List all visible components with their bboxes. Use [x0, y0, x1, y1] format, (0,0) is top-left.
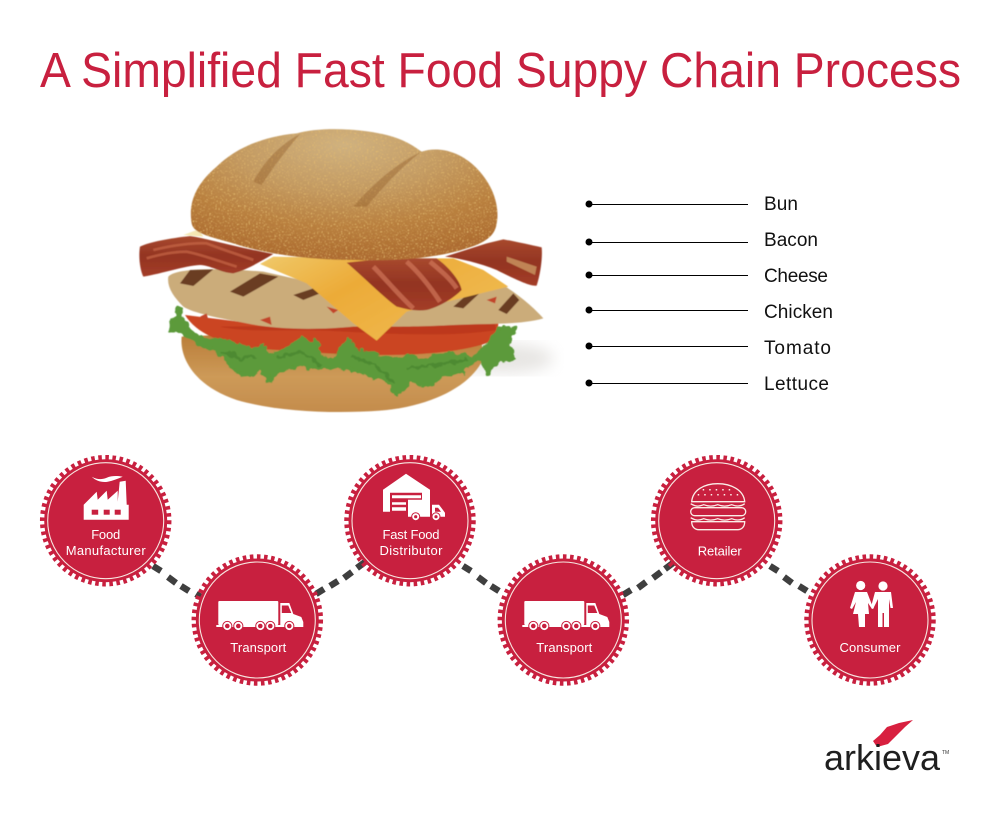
- label: Tomato: [586, 338, 831, 359]
- label text: Food: [91, 527, 120, 542]
- ingredient labels: [586, 194, 833, 395]
- cheese: [183, 229, 508, 341]
- title: A Simplified Fast Food Suppy Chain Process: [40, 44, 961, 98]
- logo: arkieva: [824, 720, 949, 778]
- logo wordmark: arkieva: [824, 737, 941, 778]
- icon: factory: [84, 476, 129, 520]
- label text: Fast Food: [382, 527, 440, 542]
- icon: warehouse and van: [383, 474, 445, 521]
- bottom bun: [181, 333, 483, 412]
- icon: truck: [216, 601, 303, 631]
- step: Transport: [500, 557, 626, 683]
- label text: Transport: [536, 640, 593, 655]
- step: Fast Food Distributor: [347, 458, 473, 584]
- label text: Retailer: [698, 544, 742, 559]
- label: Bacon: Bacon: [764, 230, 818, 251]
- icon: burger outline: [691, 484, 746, 530]
- icon: couple: [850, 581, 893, 627]
- bacon strips: [139, 236, 273, 277]
- label: Chicken: [586, 302, 833, 323]
- tomato: [185, 315, 498, 355]
- label: Lettuce: [586, 374, 829, 395]
- dashed connectors: [153, 562, 807, 597]
- lettuce: [168, 308, 515, 395]
- burger illustration: [139, 129, 553, 412]
- burger shadow: [453, 343, 553, 373]
- label: Lettuce: Lettuce: [764, 374, 829, 395]
- step: Retailer: [654, 458, 780, 584]
- label text: Manufacturer: [66, 543, 146, 558]
- icon: truck: [522, 601, 609, 631]
- trademark: TM: [942, 750, 949, 756]
- label: Bun: [586, 194, 798, 215]
- logo swoosh: [873, 720, 913, 747]
- step: Transport: [194, 557, 320, 683]
- label text: Transport: [230, 640, 287, 655]
- label: Bacon: [586, 230, 818, 251]
- chicken: [168, 269, 543, 329]
- label: Cheese: [586, 266, 828, 287]
- label text: Distributor: [380, 543, 443, 558]
- label: Chicken: Chicken: [764, 302, 833, 323]
- step: Consumer: [807, 557, 933, 683]
- label text: Consumer: [840, 640, 901, 655]
- step: Food Manufacturer: [43, 458, 169, 584]
- label: Tomato: Tomato: [764, 338, 831, 359]
- top bun: [191, 129, 497, 260]
- label: Bun: Bun: [764, 194, 798, 215]
- label: Cheese: Cheese: [764, 266, 828, 287]
